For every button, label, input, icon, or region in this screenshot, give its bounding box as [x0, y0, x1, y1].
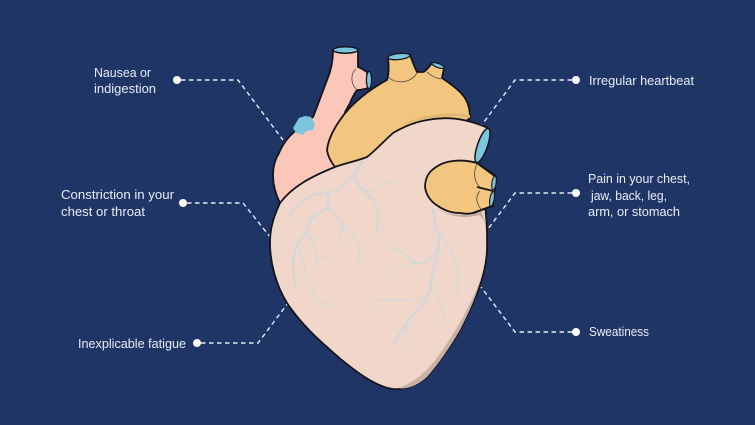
- heart shadow: [398, 263, 484, 388]
- yellow vessel stub: [425, 161, 497, 214]
- label: nausea: [94, 65, 156, 96]
- label: chest pain: [588, 171, 690, 219]
- label: chest pain: arm, or stomach: [588, 204, 680, 219]
- connector: nausea: [173, 76, 283, 140]
- label: fatigue: Inexplicable fatigue: [78, 336, 186, 351]
- connector: chest pain: [488, 189, 580, 229]
- heart illustration: [270, 47, 497, 389]
- label: nausea: Nausea or: [94, 65, 152, 80]
- label: chest pain: Pain in your chest,: [588, 171, 690, 186]
- blue patch: [293, 116, 315, 135]
- connector: fatigue: [193, 303, 288, 347]
- yellow aorta: [327, 52, 470, 167]
- main heart body: [270, 118, 493, 389]
- label: constriction: [61, 187, 175, 219]
- label: irregular heartbeat: Irregular heartbeat: [589, 73, 694, 88]
- coronary veins: [288, 162, 458, 350]
- label: sweatiness: Sweatiness: [589, 324, 649, 339]
- label: nausea: indigestion: [94, 81, 156, 96]
- label: constriction: Constriction in your: [61, 187, 175, 202]
- label: chest pain: jaw, back, leg,: [590, 188, 667, 203]
- connector: sweatiness: [481, 287, 580, 336]
- connector: irregular heartbeat: [481, 76, 580, 126]
- pink atrium and vessel: [273, 47, 372, 203]
- connector: constriction: [179, 199, 271, 238]
- label: constriction: chest or throat: [61, 204, 145, 219]
